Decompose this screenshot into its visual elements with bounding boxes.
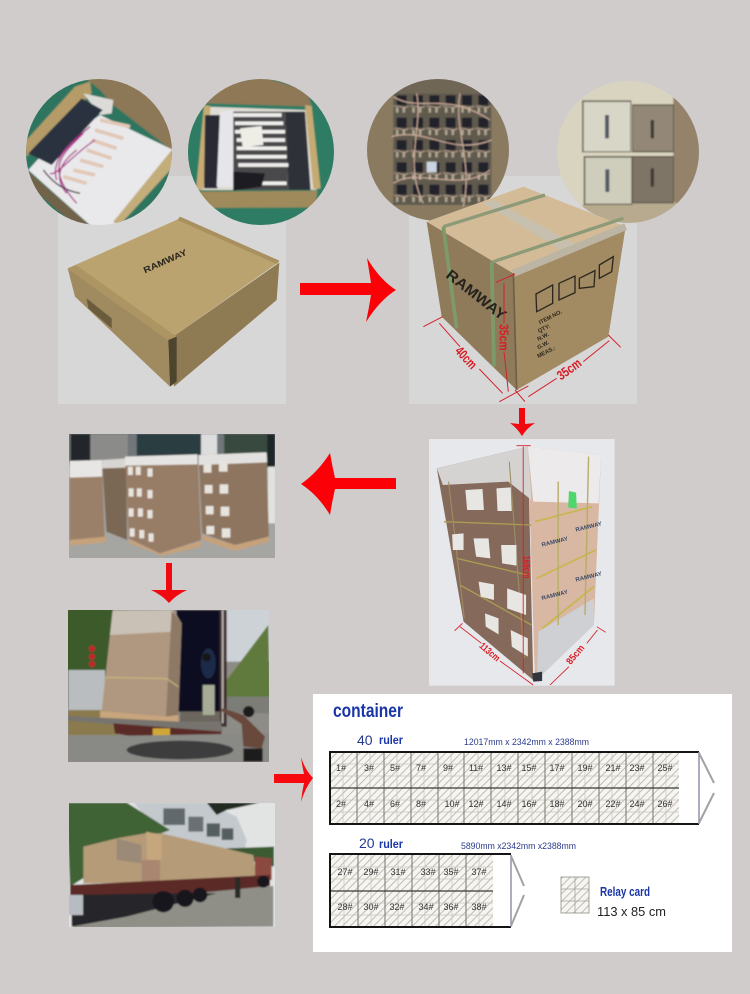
carton shipping marks: ITEM NO. [538, 309, 564, 326]
pallet dimension lines [455, 446, 606, 685]
carton dimension labels [452, 324, 584, 383]
labels: 20 ruler positions: 35# [443, 867, 459, 877]
labels: 20 ruler positions: 30# [363, 902, 379, 912]
label: 20 ruler: ruler [379, 837, 403, 851]
diagram: 40 ruler container [330, 752, 714, 824]
carton dimension labels: 35cm [496, 324, 511, 351]
carton shipping marks: N.W. [537, 332, 551, 343]
labels: 40 ruler positions: 24# [629, 799, 645, 809]
carton dimension labels: 35cm [554, 355, 584, 383]
photo: stacked pallets in yard [67, 432, 278, 560]
labels: 20 ruler positions: 34# [418, 902, 434, 912]
photo: master carton inner layer of relays [365, 77, 512, 227]
labels: 40 ruler positions: 23# [629, 763, 645, 773]
legend label: relay card: Relay card [600, 884, 650, 899]
labels: 20 ruler positions: 36# [443, 902, 459, 912]
photo: small branded kraft carton [68, 217, 279, 387]
photo: wired relays in open carton [26, 79, 172, 225]
brand print on carton lid: RAMWAY [142, 247, 189, 275]
labels: 40 ruler positions [336, 763, 673, 809]
pallet brand prints: RAMWAY [575, 571, 603, 584]
labels: 20 ruler positions: 29# [363, 867, 379, 877]
carton brand print: RAMWAY [443, 267, 509, 324]
pallet dimension labels: 113cm [476, 641, 502, 664]
labels: 40 ruler positions: 9# [443, 763, 453, 773]
carton shipping marks [537, 309, 564, 360]
labels: 40 ruler positions: 26# [657, 799, 673, 809]
labels: 40 ruler positions: 22# [605, 799, 621, 809]
labels: 40 ruler positions: 17# [549, 763, 565, 773]
arrow: truck to container diagram [274, 757, 313, 802]
pallet dimension labels [476, 556, 587, 667]
pallet dimension labels: 169cm [520, 556, 532, 578]
legend label: relay card size: 113 x 85 cm [597, 904, 666, 919]
labels: 40 ruler positions: 1# [336, 763, 346, 773]
labels: 20 ruler positions: 37# [471, 867, 487, 877]
labels: 40 ruler positions: 19# [577, 763, 593, 773]
panel: container loading diagram [313, 694, 732, 952]
carton dimension lines [423, 274, 621, 402]
photo: pallet loaded on truck [67, 608, 270, 763]
labels: 40 ruler positions: 15# [521, 763, 537, 773]
panel: small carton backdrop [58, 176, 286, 404]
labels: 40 ruler positions: 2# [336, 799, 346, 809]
heading: container: container [333, 701, 403, 722]
labels: 20 ruler positions: 38# [471, 902, 487, 912]
label: 20 ruler [359, 835, 403, 851]
labels: 40 ruler positions: 18# [549, 799, 565, 809]
labels: 40 ruler positions: 10# [444, 799, 460, 809]
label: 40 ruler [357, 732, 403, 748]
panel: master carton backdrop [409, 176, 637, 404]
labels: 40 ruler positions: 16# [521, 799, 537, 809]
label: 20 ruler dimensions: 5890mm x2342mm x2388mm [461, 841, 576, 852]
labels: 40 ruler positions: 11# [469, 763, 483, 773]
arrow: master carton to pallet [510, 408, 535, 436]
labels: 40 ruler positions: 5# [390, 763, 400, 773]
labels: 40 ruler positions: 21# [605, 763, 621, 773]
legend: relay card pallet footprint [561, 877, 589, 913]
labels: 40 ruler positions: 14# [496, 799, 512, 809]
labels: 40 ruler positions: 12# [468, 799, 484, 809]
labels: 20 ruler positions: 33# [420, 867, 436, 877]
labels: 40 ruler positions: 20# [577, 799, 593, 809]
labels: 40 ruler positions: 25# [657, 763, 673, 773]
labels: 40 ruler positions: 6# [390, 799, 400, 809]
labels: 40 ruler positions: 4# [364, 799, 374, 809]
labels: 20 ruler positions: 32# [389, 902, 405, 912]
labels: 40 ruler positions: 7# [416, 763, 426, 773]
labels: 20 ruler positions: 31# [390, 867, 406, 877]
photo: flatbed truck with cargo [67, 800, 280, 930]
label: 40 ruler dimensions: 12017mm x 2342mm x 2388mm [464, 737, 589, 748]
labels: 20 ruler positions [337, 867, 487, 912]
photo: wrapped pallet with dimensions [429, 439, 615, 686]
labels: 40 ruler positions: 3# [364, 763, 374, 773]
arrow: stacked pallets to truck [151, 563, 187, 603]
carton shipping marks: QTY: [537, 323, 552, 335]
arrow: pallet to stacked pallets [301, 453, 396, 515]
pallet brand prints [541, 521, 603, 602]
labels: 20 ruler positions: 27# [337, 867, 353, 877]
arrow: small carton to master carton [300, 258, 396, 322]
carton shipping marks: MEAS.: [537, 345, 557, 360]
labels: 40 ruler positions: 8# [416, 799, 426, 809]
label: 40 ruler: 40 [357, 732, 373, 748]
photo: four boxes inside master carton [557, 81, 699, 223]
label: 40 ruler: ruler [379, 733, 403, 747]
carton shipping marks: G.W. [537, 340, 551, 351]
carton handling symbols [536, 257, 613, 312]
pallet brand prints: RAMWAY [575, 521, 603, 534]
labels: 20 ruler positions: 28# [337, 902, 353, 912]
pallet brand prints: RAMWAY [541, 536, 569, 549]
labels: 40 ruler positions: 13# [496, 763, 512, 773]
carton dimension labels: 40cm [452, 343, 480, 372]
label: 20 ruler: 20 [359, 835, 375, 851]
pallet dimension labels: 85cm [564, 643, 587, 667]
diagram: 20 ruler container [330, 854, 524, 927]
photo: master carton with dimensions [423, 187, 626, 402]
photo: relays packed in carton [188, 79, 334, 225]
pallet brand prints: RAMWAY [541, 590, 569, 602]
